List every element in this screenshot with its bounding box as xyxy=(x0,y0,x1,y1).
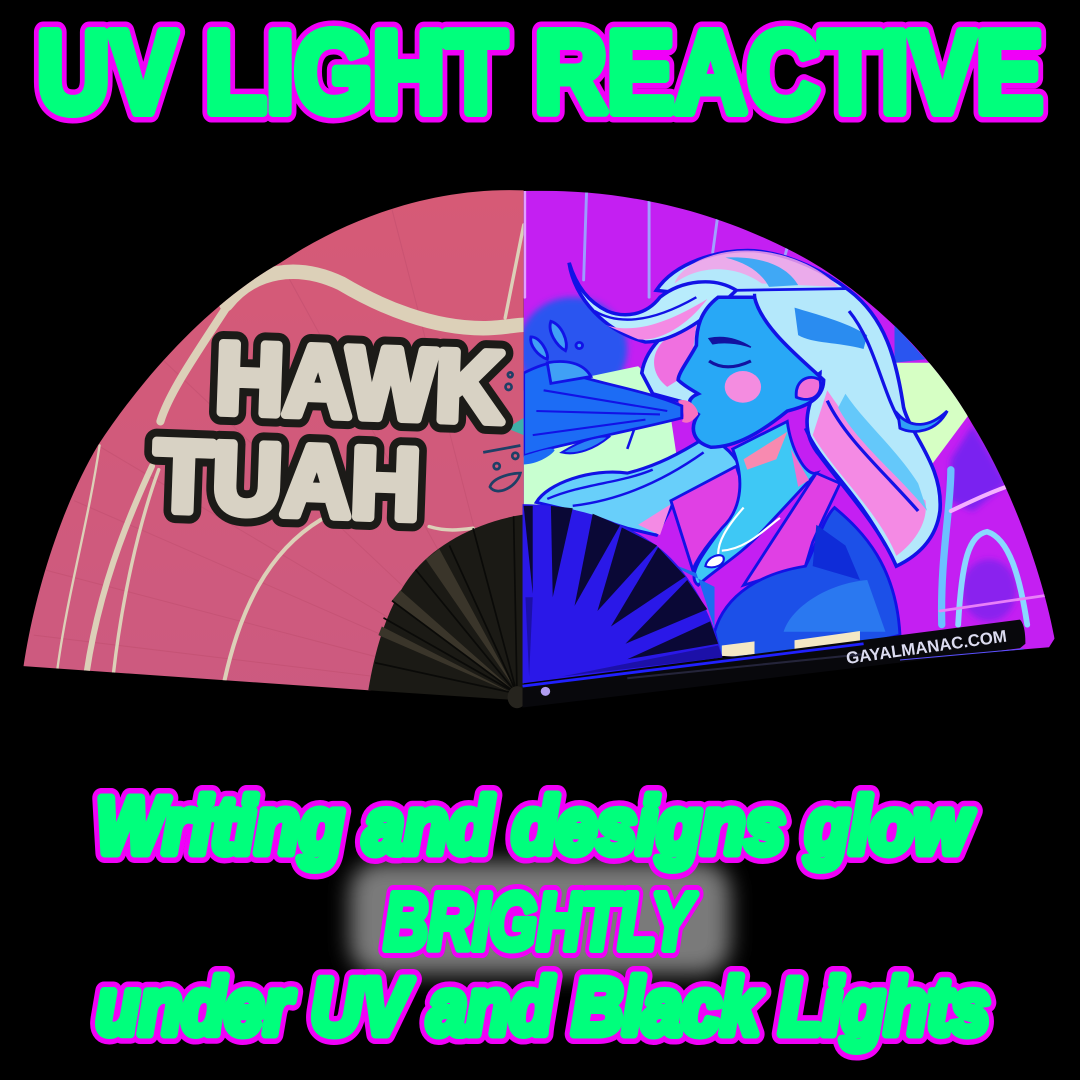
fan text: HAWK TUAH: HAWK xyxy=(214,322,506,444)
water spray xyxy=(524,363,682,456)
left black ribs xyxy=(368,514,526,708)
back flowing hair xyxy=(536,439,740,535)
caption line 2: BRIGHTLY: BRIGHTLY xyxy=(384,877,697,966)
fan text: HAWK TUAH: TUAH xyxy=(152,420,422,541)
eyebrow and closed eye xyxy=(709,338,751,347)
necklace xyxy=(705,508,780,567)
lips xyxy=(678,400,698,423)
splash drops xyxy=(531,321,591,383)
cheek xyxy=(725,371,761,403)
small splash doodles xyxy=(483,372,520,491)
neck and chest xyxy=(694,421,816,585)
ear xyxy=(796,377,821,399)
background shapes xyxy=(524,292,632,376)
fan text: HAWK TUAH: TUAH xyxy=(152,420,422,541)
glow behind BRIGHTLY xyxy=(350,862,730,974)
caption line 1: Writing and designs glow xyxy=(96,781,974,870)
fan: left half, daylight view xyxy=(10,180,527,708)
fan text: HAWK TUAH xyxy=(152,320,506,544)
caption line 1: Writing and designs glow xyxy=(96,781,974,870)
jacket collars xyxy=(671,466,747,570)
right fabric panel with girl illustration xyxy=(524,190,1054,656)
guard stick xyxy=(523,620,1025,708)
fan text: HAWK TUAH: HAWK xyxy=(214,322,506,444)
hair flick right xyxy=(898,411,947,431)
face xyxy=(678,297,824,447)
fan brand label: GAYALMANAC.COM xyxy=(845,627,1008,668)
hair mass xyxy=(642,251,940,566)
windswept hair lock xyxy=(569,263,736,342)
left fabric panel xyxy=(10,180,527,708)
caption line 2: BRIGHTLY: BRIGHTLY xyxy=(384,877,697,966)
jacket body xyxy=(715,508,900,663)
fan: right half, UV view xyxy=(518,180,1067,708)
right ribs xyxy=(523,504,723,683)
